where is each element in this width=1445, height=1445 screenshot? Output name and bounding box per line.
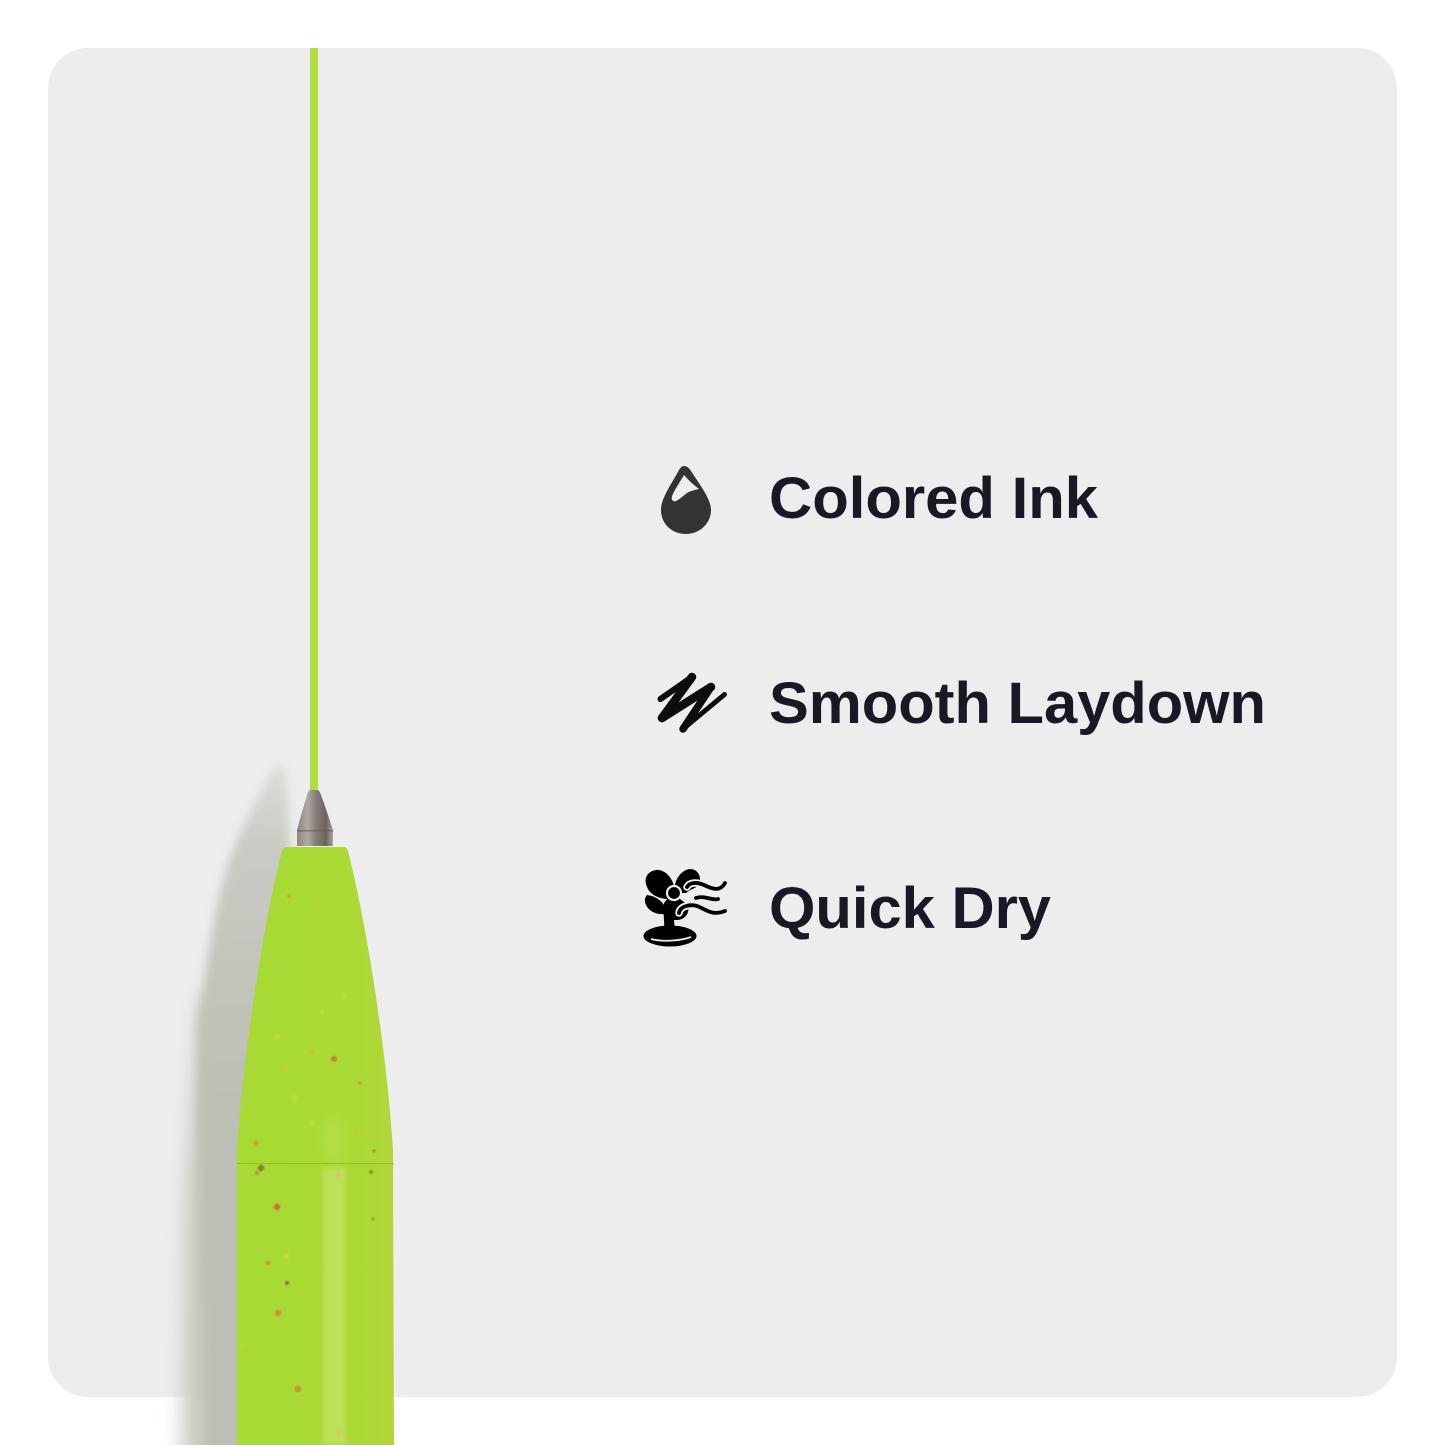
label: Quick Dry: Quick Dry (769, 876, 1051, 941)
pen body (237, 847, 394, 1445)
ink line (310, 48, 318, 792)
feature: smooth laydown (660, 671, 1266, 736)
body highlight (323, 1168, 346, 1445)
fan stand and lower blade (664, 893, 689, 932)
pen shadow (182, 764, 290, 1445)
speckles (245, 894, 376, 1435)
icon: fan with wind (644, 869, 725, 946)
label: Colored Ink: Colored Ink (769, 466, 1099, 531)
feature: quick dry (644, 869, 1051, 946)
pen (237, 790, 394, 1445)
fan hub (667, 886, 681, 900)
pen nib (297, 790, 333, 846)
barrel seam (237, 1163, 394, 1164)
label: Smooth Laydown: Smooth Laydown (769, 671, 1266, 736)
icon: ink drop (661, 466, 711, 534)
wind lines (679, 883, 725, 913)
upper highlight (323, 1116, 343, 1164)
fan blades (646, 870, 676, 899)
icon: scribble (660, 677, 724, 729)
fan base (644, 926, 696, 946)
feature: colored ink (661, 466, 1099, 534)
